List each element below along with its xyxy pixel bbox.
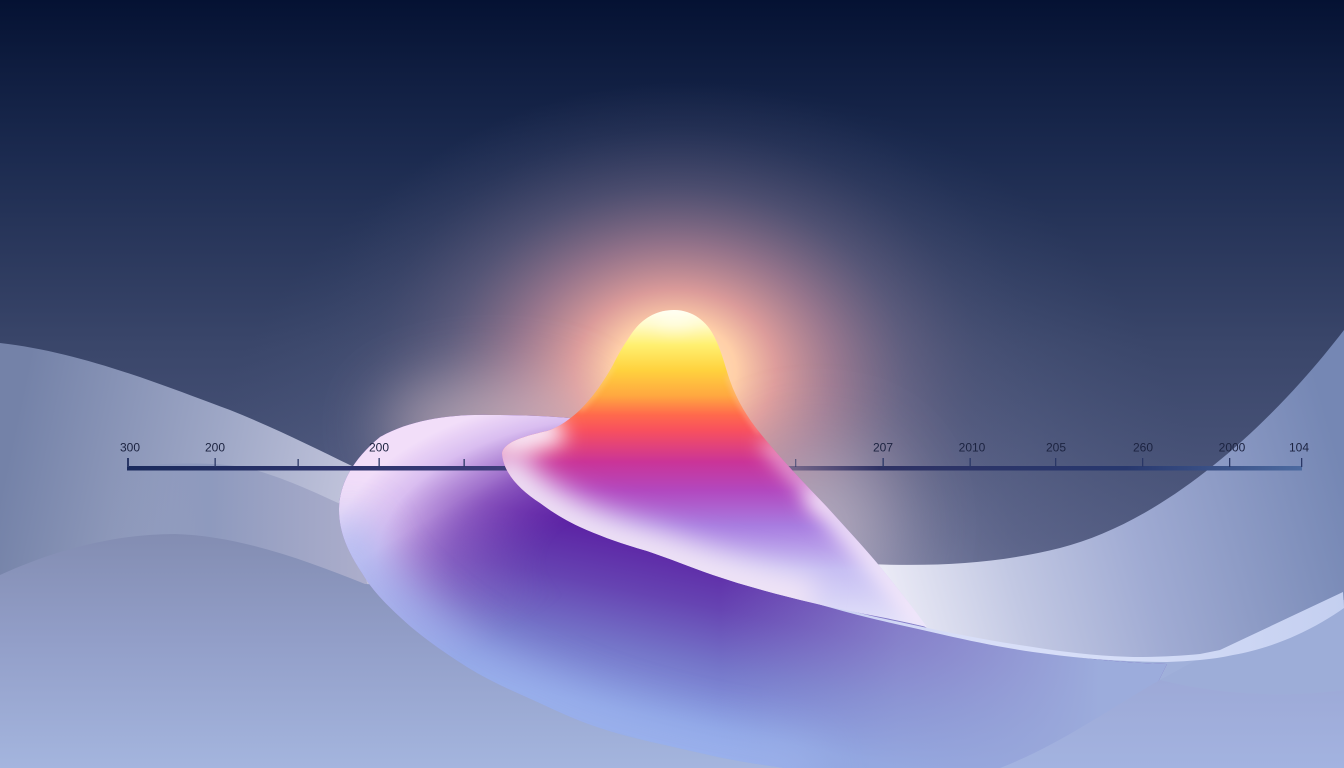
peak soft edges <box>502 311 927 627</box>
axis labels: 200 <box>205 440 225 454</box>
axis labels <box>120 440 1309 454</box>
wave: lower right <box>1000 680 1344 768</box>
axis labels: 207 <box>873 440 893 454</box>
wave: lower left <box>0 534 1000 768</box>
axis line <box>127 466 1302 470</box>
axis labels: 2000 <box>1219 440 1246 454</box>
blob blue lower-left edge <box>339 520 820 768</box>
purple blob <box>320 400 1200 768</box>
axis ticks <box>127 458 1302 467</box>
pale haze right of peak <box>750 455 890 595</box>
axis labels: 104 <box>1289 440 1309 454</box>
axis labels: 200 <box>369 440 389 454</box>
axis labels: 205 <box>1046 440 1066 454</box>
pale haze left of peak <box>380 380 600 470</box>
wave: back right <box>866 330 1344 768</box>
peak shape <box>502 310 927 627</box>
axis labels: 260 <box>1133 440 1153 454</box>
blob right fade <box>740 584 1167 768</box>
white ribbon <box>780 592 1344 662</box>
right base below ribbon <box>1160 600 1344 694</box>
wave: back left <box>0 343 400 768</box>
axis labels: 300 <box>120 440 140 454</box>
blob base <box>320 400 1200 768</box>
blob pale upper-left <box>339 414 570 640</box>
wave: left overlap <box>110 464 420 768</box>
base below ribbon <box>800 600 1344 768</box>
timeline axis <box>120 440 1309 470</box>
peak gradient body <box>502 310 927 627</box>
axis labels: 2010 <box>959 440 986 454</box>
